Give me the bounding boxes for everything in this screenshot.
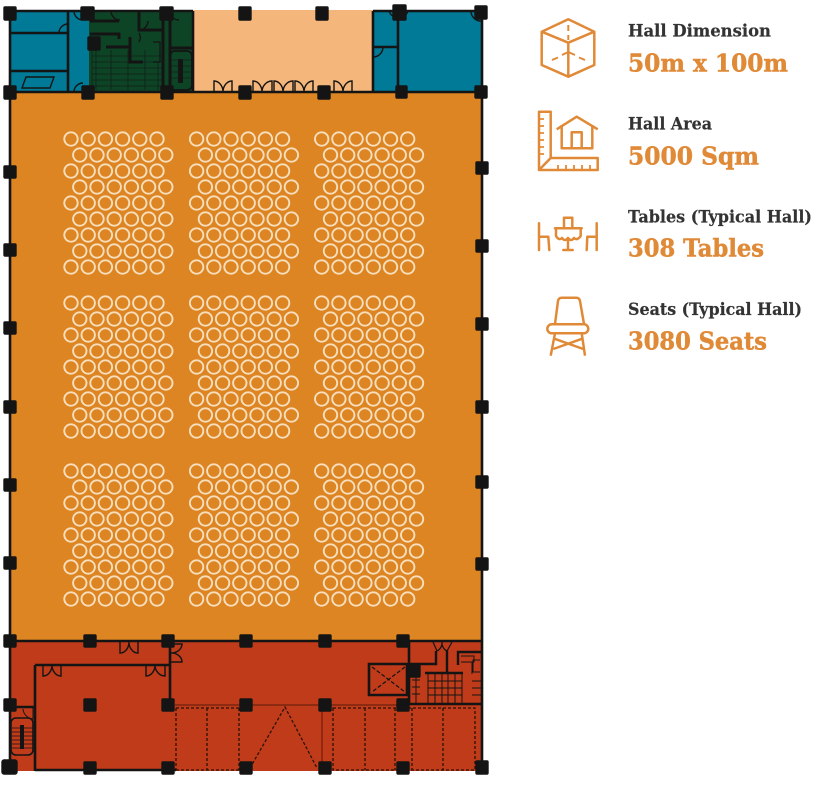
label: hall area: Hall Area	[628, 114, 712, 133]
label: hall dimension: Hall Dimension	[628, 22, 771, 41]
icon: cube	[542, 19, 594, 77]
room: green service core	[89, 11, 193, 92]
label: tables: Tables (Typical Hall)	[628, 207, 812, 226]
icon: chair	[547, 298, 588, 356]
door swings	[43, 11, 482, 676]
room: peach foyer	[193, 10, 373, 92]
floor plan	[2, 5, 488, 774]
stair lines	[92, 50, 192, 90]
room: left teal rooms	[10, 11, 89, 92]
stat: hall area	[539, 112, 759, 170]
bottom right service core	[409, 642, 482, 704]
stair core	[178, 59, 183, 83]
room: red back of house	[10, 641, 482, 771]
stat: tables	[539, 207, 812, 263]
stat: hall dimension	[542, 19, 788, 78]
stat: seats	[547, 298, 802, 356]
room: main orange hall	[10, 92, 482, 641]
icon: house and set square	[539, 112, 598, 170]
bottom left stair	[11, 708, 33, 755]
bay divider	[321, 705, 323, 768]
room: right teal rooms	[373, 11, 482, 92]
value: hall dimension: 50m x 100m	[628, 49, 788, 78]
lift cross	[372, 667, 405, 692]
structural columns	[2, 5, 488, 774]
value: hall area: 5000 Sqm	[628, 141, 759, 170]
teal room detail	[22, 77, 54, 88]
label: seats: Seats (Typical Hall)	[628, 300, 802, 319]
loading bays	[176, 707, 475, 770]
value: seats: 3080 Seats	[628, 326, 767, 355]
walls	[10, 11, 482, 772]
green core walls	[90, 11, 193, 92]
bay lines	[175, 704, 402, 706]
seating tables	[64, 132, 423, 606]
value: tables: 308 Tables	[628, 234, 764, 263]
icon: table and chairs	[539, 218, 597, 250]
